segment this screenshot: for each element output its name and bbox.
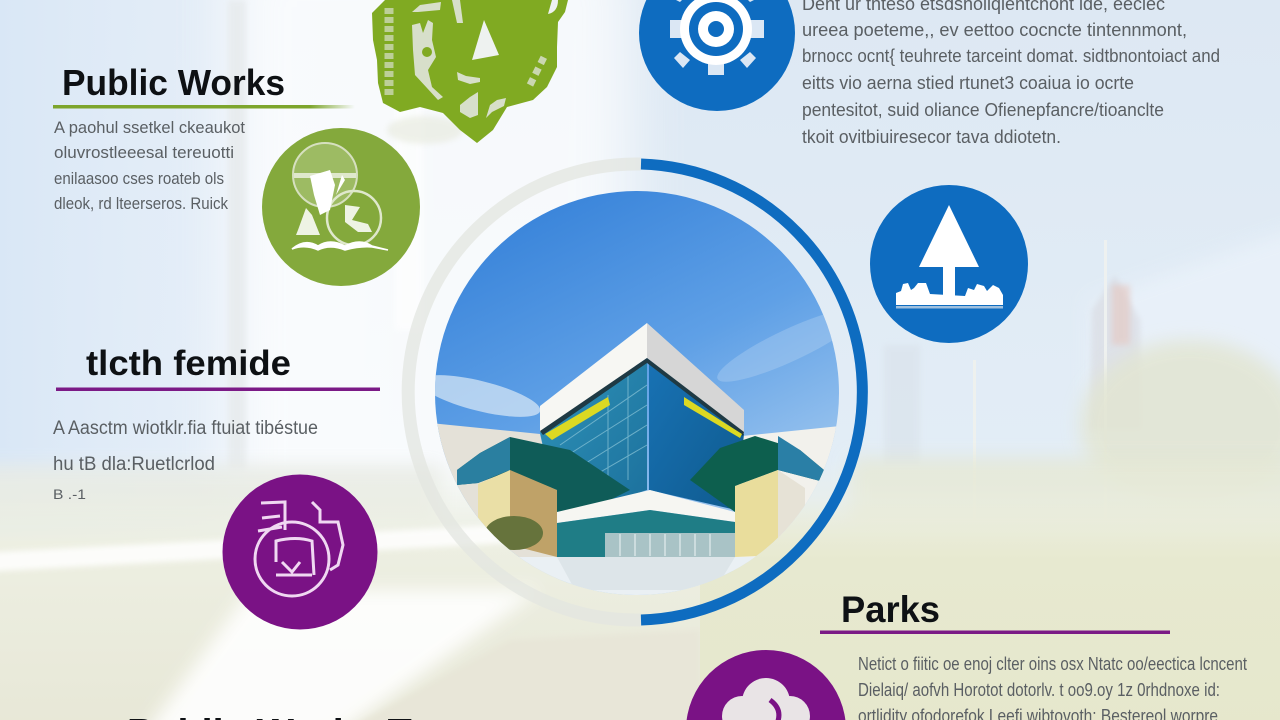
body text: Parks: Dielaiq/ aofvh Horotot dotorlv. t oo9.oy 1z 0rhdnoxe id: bbox=[858, 680, 1220, 700]
top green decorative emblem bbox=[372, 0, 568, 144]
central ring and photo bbox=[408, 164, 869, 620]
heading: Public Works: Public Works bbox=[62, 62, 285, 103]
body text: top right bbox=[802, 0, 1220, 147]
body text: Public Works: dleok, rd lteerseros. Ruick bbox=[54, 195, 229, 213]
heading: tlcth femide bbox=[86, 344, 291, 383]
panel: Public Works bbox=[53, 62, 355, 213]
icon: blue gear target bbox=[639, 0, 795, 111]
green heading rule bbox=[53, 105, 355, 108]
body text: top right: brnocc ocnt{ teuhrete tarceint domat. sidtbnontoiact and bbox=[802, 46, 1220, 66]
body text: hu tB dla:Ruetlcrlod bbox=[53, 454, 215, 475]
icon: green circle with globes bbox=[262, 128, 420, 286]
pale outer ring bbox=[408, 164, 641, 620]
heading: Parks: Parks bbox=[841, 589, 940, 630]
body text: Public Works bbox=[54, 119, 245, 213]
icon: purple circle with vehicle bbox=[222, 474, 378, 630]
body text: top right: tkoit ovitbiuiresecor tava ddiotetn. bbox=[802, 127, 1061, 147]
panel: Parks bbox=[820, 589, 1247, 720]
purple heading rule bbox=[56, 388, 380, 391]
photo: glass civic building bbox=[435, 191, 839, 595]
body text: top right: eitts vio aerna stied rtunet3 coaiua io ocrte bbox=[802, 73, 1134, 93]
body text: Parks bbox=[858, 654, 1247, 720]
body text bbox=[53, 418, 318, 502]
icon: purple circle with tree cloud bbox=[686, 650, 846, 720]
body text: top right: ureea poeteme,, ev eettoo cocncte tintennmont, bbox=[802, 20, 1187, 40]
body text: A Aasctm wiotklr.fia ftuiat tibéstue bbox=[53, 418, 318, 439]
body text: Public Works: enilaasoo cses roateb ols bbox=[54, 170, 224, 188]
icon: blue circle with tree bbox=[870, 185, 1028, 343]
purple heading rule bbox=[820, 630, 1170, 634]
blue arc bbox=[641, 164, 862, 620]
panel: second service heading bbox=[53, 344, 380, 502]
body text: B .-1 bbox=[53, 486, 86, 502]
body text: Public Works: A paohul ssetkel ckeaukot bbox=[54, 119, 245, 137]
body text: top right: pentesitot, suid oliance Ofienepfancre/tioanclte bbox=[802, 100, 1164, 120]
body text: Public Works: oluvrostleeesal tereuotti bbox=[54, 144, 234, 162]
